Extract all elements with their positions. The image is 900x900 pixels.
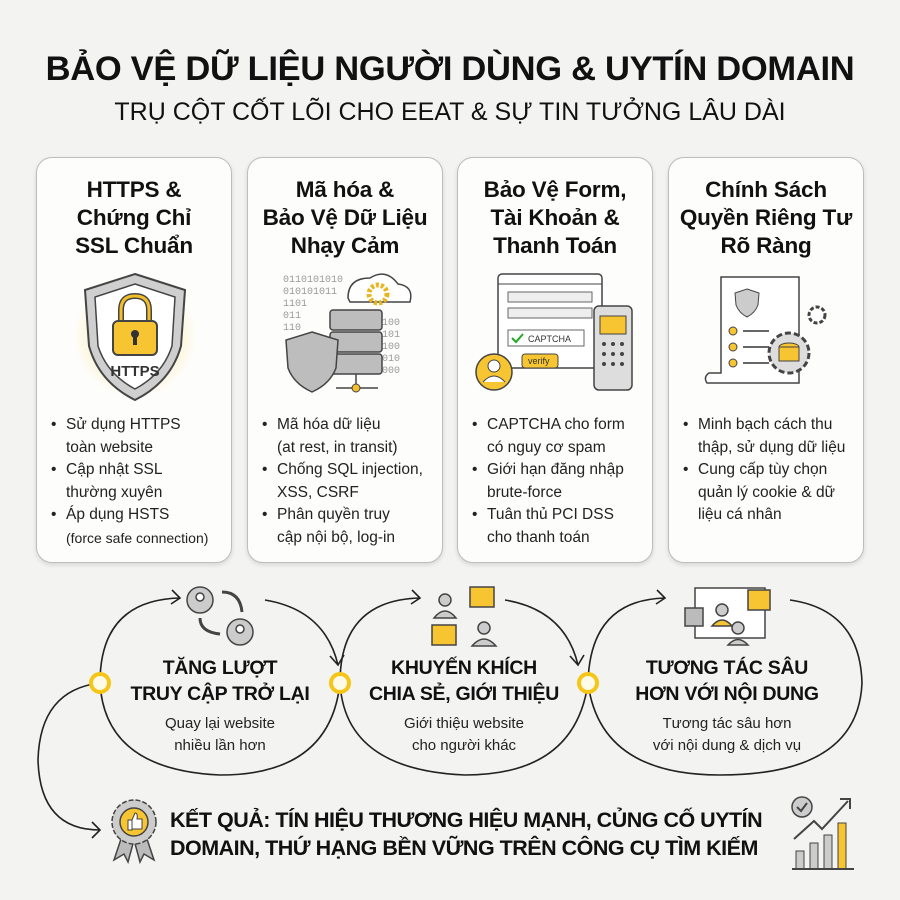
bullets: quản lý cookie & dữ — [698, 484, 835, 500]
bullets — [684, 416, 845, 523]
bullets: Sử dụng HTTPS — [66, 416, 181, 433]
icon: server shield: 101 — [382, 330, 400, 341]
heading: Mã hóa & — [296, 177, 394, 202]
heading: Chứng Chỉ — [77, 205, 191, 230]
icon: server shield: 010101011 — [283, 287, 337, 298]
cycle step 3: HƠN VỚI NỘI DUNG — [635, 683, 819, 705]
bullets — [262, 416, 423, 546]
bullets — [472, 416, 625, 546]
bullets: (at rest, in transit) — [277, 438, 398, 456]
icon: server shield: 0110101010 — [283, 275, 343, 286]
bullets — [52, 416, 208, 546]
cycle step 1 — [130, 656, 310, 754]
icon: shield lock — [77, 273, 193, 402]
bullets: Minh bạch cách thu — [698, 416, 832, 433]
heading: Thanh Toán — [493, 233, 617, 258]
heading: Tài Khoản & — [490, 205, 620, 230]
cycle step 3 — [635, 656, 819, 754]
bullets: Giới hạn đăng nhập — [487, 461, 624, 478]
result text — [170, 808, 762, 860]
result text: DOMAIN, THỨ HẠNG BỀN VỮNG TRÊN CÔNG CỤ TÌM KIẾM — [170, 836, 758, 860]
result text: KẾT QUẢ: TÍN HIỆU THƯƠNG HIỆU MẠNH, CỦNG CỐ UYTÍN — [170, 808, 762, 832]
panel: HTTPS — [36, 157, 232, 563]
heading: Bảo Vệ Dữ Liệu — [263, 205, 427, 230]
cycle step 2: Giới thiệu website — [404, 715, 524, 732]
cycle step 1: TRUY CẬP TRỞ LẠI — [130, 683, 310, 705]
subtitle: TRỤ CỘT CỐT LÕI CHO EEAT & SỰ TIN TƯỞNG LÂU DÀI — [114, 98, 786, 126]
panel: forms — [457, 157, 653, 563]
bullets: toàn website — [66, 438, 153, 456]
bullets: Chống SQL injection, — [277, 461, 423, 478]
bullets: Áp dụng HSTS — [66, 506, 169, 523]
bullets: thường xuyên — [66, 484, 162, 500]
heading: Quyền Riêng Tư — [680, 205, 852, 230]
cycle step 3: TƯƠNG TÁC SÂU — [646, 657, 808, 679]
heading — [75, 177, 193, 258]
cycle diagram — [37, 586, 863, 839]
icon: growth chart — [791, 796, 854, 870]
bullets: có nguy cơ spam — [487, 438, 606, 456]
icon: captcha form — [475, 273, 633, 391]
bullets: XSS, CSRF — [277, 484, 359, 500]
panel: encryption — [247, 157, 443, 563]
heading: Chính Sách — [705, 177, 827, 202]
bullets: CAPTCHA cho form — [487, 416, 625, 433]
heading — [484, 177, 626, 258]
bullets: cập nội bộ, log-in — [277, 528, 395, 546]
bullets: liệu cá nhân — [698, 506, 782, 523]
cycle step 1: Quay lại website — [165, 715, 275, 732]
heading — [680, 177, 852, 258]
title: BẢO VỆ DỮ LIỆU NGƯỜI DÙNG & UYTÍN DOMAIN — [46, 50, 854, 88]
cycle step 2: KHUYẾN KHÍCH — [391, 657, 537, 679]
icon: server shield: 011 — [283, 311, 301, 322]
cycle step 1: TĂNG LƯỢT — [163, 657, 277, 679]
cycle step 2: CHIA SẺ, GIỚI THIỆU — [369, 683, 559, 705]
bullets: (force safe connection) — [66, 530, 208, 546]
heading: Rõ Ràng — [720, 233, 812, 258]
cycle step 2 — [369, 656, 559, 754]
bullets: thập, sử dụng dữ liệu — [698, 438, 845, 456]
icon: return users — [187, 587, 253, 645]
bullets: brute-force — [487, 484, 562, 500]
bullets: Tuân thủ PCI DSS — [487, 506, 614, 523]
icon: server shield: 010 — [382, 354, 400, 365]
bullets: Cập nhật SSL — [66, 461, 163, 478]
icon: server shield — [283, 273, 412, 393]
icon: captcha form: verify — [528, 356, 550, 366]
bullets: Mã hóa dữ liệu — [277, 416, 380, 433]
icon: server shield: 100 — [382, 342, 400, 353]
icon: captcha form: CAPTCHA — [528, 334, 571, 344]
icon: engagement — [685, 588, 770, 645]
heading: Bảo Vệ Form, — [484, 177, 626, 202]
cycle step 1: nhiều lần hơn — [174, 737, 266, 754]
icon: server shield: 110 — [283, 323, 301, 334]
bullets: cho thanh toán — [487, 528, 590, 546]
cycle step 3: với nội dung & dịch vụ — [653, 737, 801, 754]
icon: policy document — [704, 276, 826, 384]
panel: privacy — [668, 157, 864, 563]
cycle step 2: cho người khác — [412, 737, 516, 754]
heading: HTTPS & — [87, 177, 181, 202]
bullets: Cung cấp tùy chọn — [698, 461, 827, 478]
bullets: Phân quyền truy — [277, 506, 390, 523]
cycle step 3: Tương tác sâu hơn — [663, 715, 791, 732]
dots — [91, 674, 597, 692]
icon: share — [432, 587, 496, 646]
icon: server shield: 1101 — [283, 299, 307, 310]
heading — [263, 177, 427, 258]
heading: SSL Chuẩn — [75, 233, 193, 258]
heading: Nhạy Cảm — [291, 233, 399, 258]
icon: badge — [111, 799, 157, 864]
icon: server shield: 100 — [382, 318, 400, 329]
icon: server shield: 000 — [382, 366, 400, 377]
icon: shield lock: HTTPS — [110, 363, 160, 380]
